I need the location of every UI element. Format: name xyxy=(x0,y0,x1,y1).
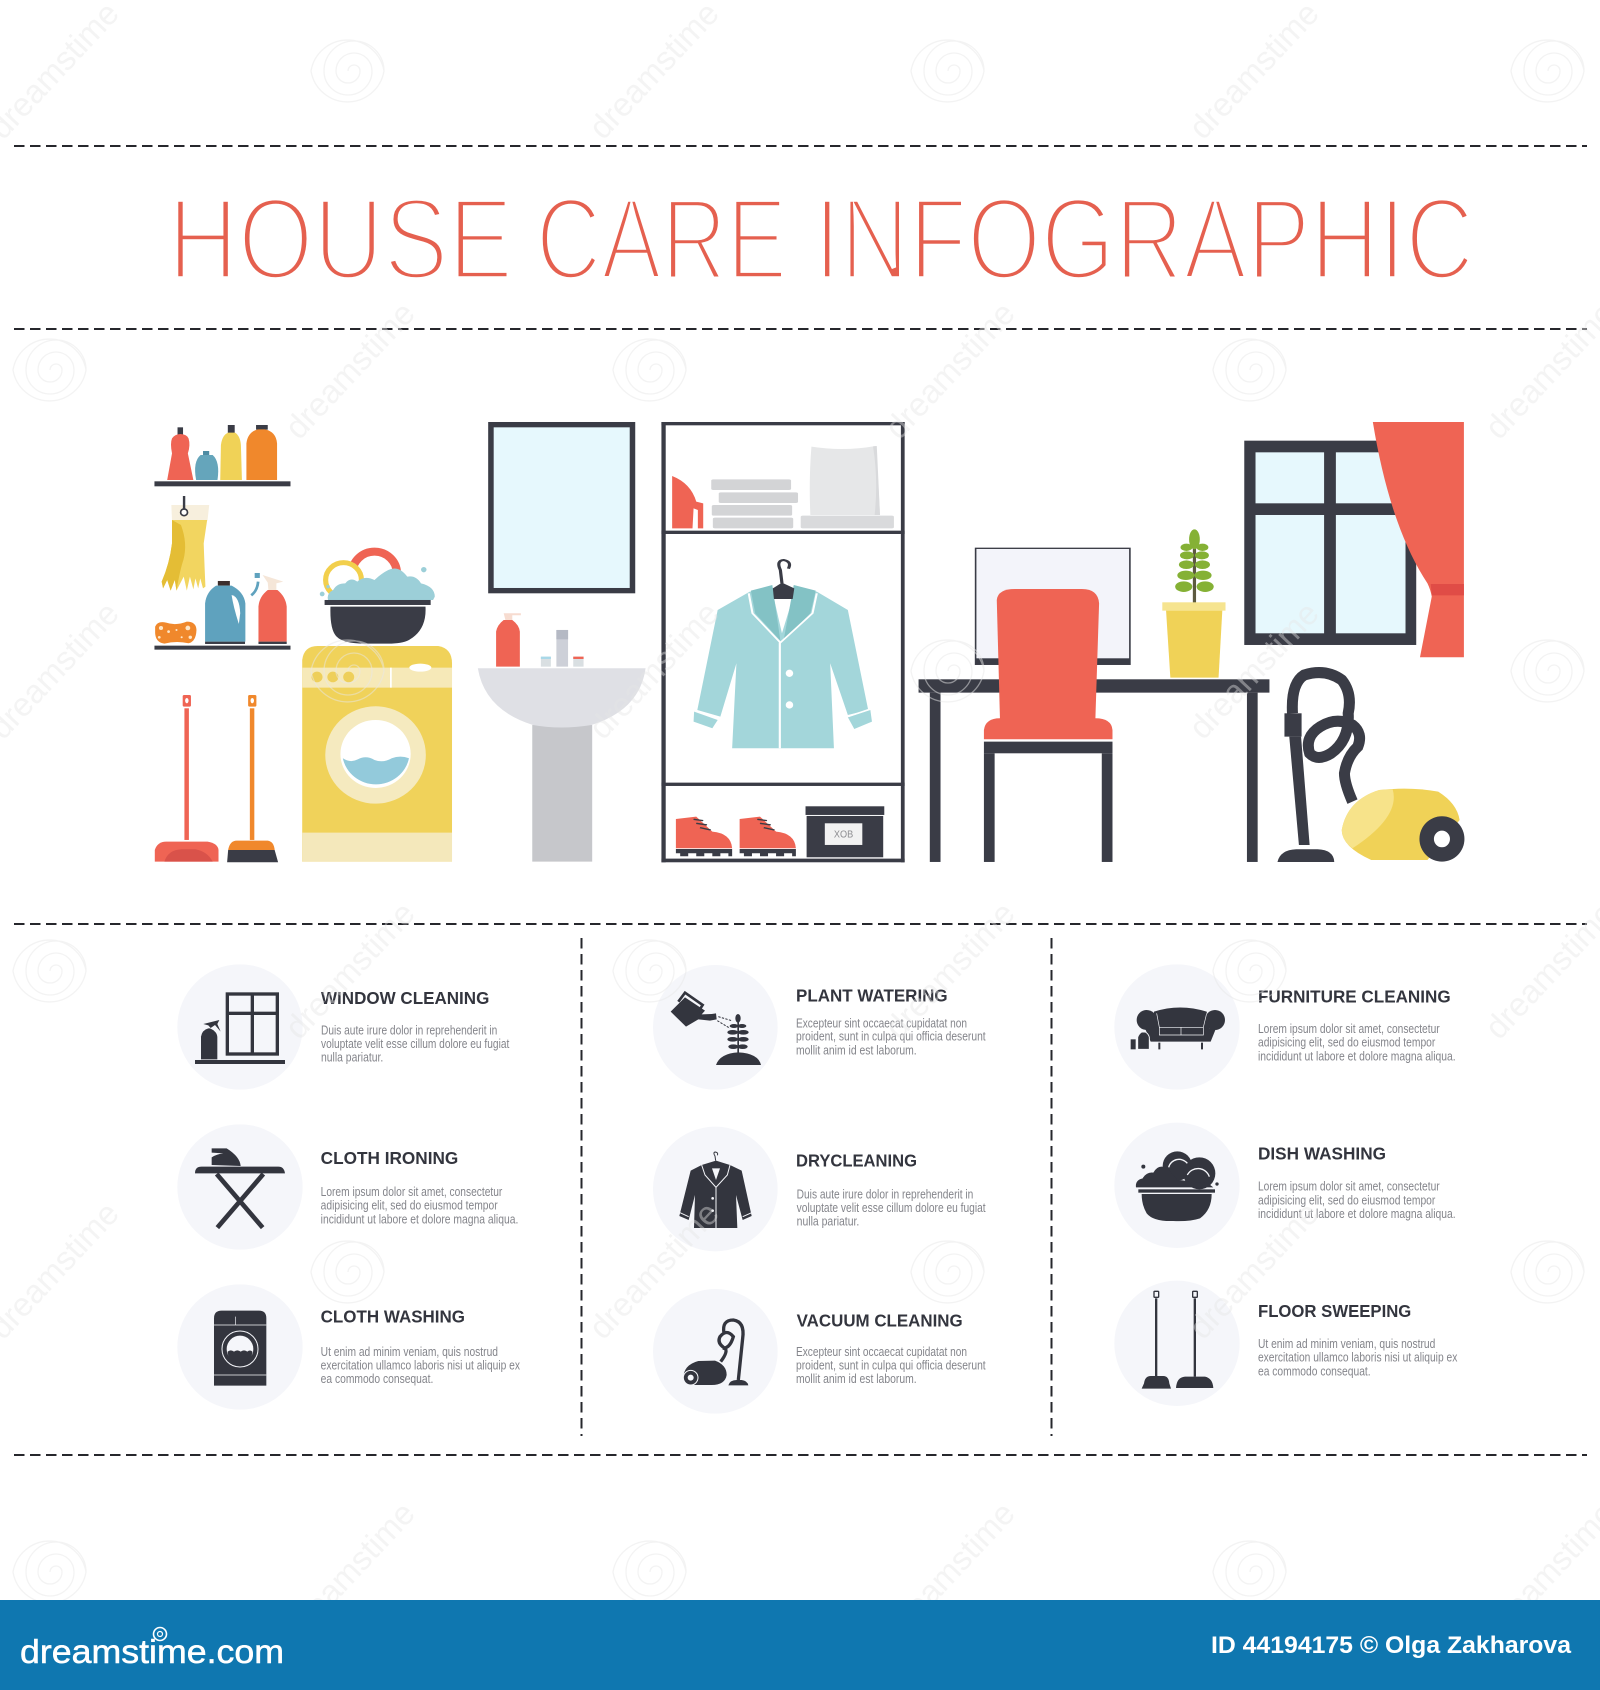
icon: watering can and plant xyxy=(671,993,761,1065)
item: plant watering: mollit anim id est laborum. xyxy=(796,1043,917,1057)
item: drycleaning: nulla pariatur. xyxy=(797,1215,859,1229)
panel: column 1 services xyxy=(177,964,521,1410)
icon: ironing board xyxy=(195,1148,285,1228)
icon: sofa and bottles xyxy=(1131,1007,1225,1049)
item: cloth ironing: CLOTH IRONING xyxy=(321,1148,458,1168)
item: cloth washing: exercitation ullamco laboris nisi ut aliquip ex xyxy=(321,1358,521,1372)
item: vacuum cleaning: proident, sunt in culpa qui officia deserunt xyxy=(796,1358,986,1372)
icon: basin with foam xyxy=(1136,1151,1219,1221)
image credit: ID 44194175 © Olga Zakharova xyxy=(1211,1632,1572,1659)
watermark overlay: dreamstime xyxy=(877,895,1022,1046)
chair xyxy=(984,589,1112,862)
item: floor sweeping: FLOOR SWEEPING xyxy=(1258,1301,1411,1321)
sink xyxy=(478,613,646,862)
item: drycleaning: DRYCLEANING xyxy=(796,1151,917,1171)
item: dish washing: Lorem ipsum dolor sit amet, consectetur xyxy=(1258,1180,1440,1194)
lower shelf with sponge and cleaners xyxy=(154,573,290,650)
watermark overlay: dreamstime xyxy=(1181,1195,1326,1346)
monitor xyxy=(975,548,1131,665)
item: drycleaning xyxy=(653,1127,986,1251)
item: vacuum cleaning: Excepteur sint occaecat cupidatat non xyxy=(796,1345,967,1359)
boots xyxy=(676,817,796,856)
item: furniture cleaning: incididunt ut labore et dolore magna aliqua. xyxy=(1258,1049,1456,1063)
item: vacuum cleaning: mollit anim id est laborum. xyxy=(796,1372,917,1386)
top shelf with bottles xyxy=(154,425,290,486)
plant pot xyxy=(1162,529,1226,678)
item: plant watering: proident, sunt in culpa qui officia deserunt xyxy=(796,1030,986,1044)
item: cloth ironing xyxy=(177,1124,518,1250)
icon: washing machine xyxy=(214,1311,266,1386)
panel: room scene left (shelves, washer, sink) xyxy=(154,425,646,862)
item: plant watering xyxy=(653,965,986,1090)
title: INFOGRAPHIC xyxy=(814,174,1474,304)
icon: vacuum xyxy=(683,1320,748,1385)
window with curtain xyxy=(1244,422,1464,657)
item: furniture cleaning: FURNITURE CLEANING xyxy=(1258,987,1451,1007)
watermark overlay: dreamstime xyxy=(581,595,726,746)
item: dish washing: adipisicing elit, sed do eiusmod tempor xyxy=(1258,1193,1435,1207)
vacuum cleaner xyxy=(1277,673,1464,862)
watermark overlay: dreamstime xyxy=(277,1495,422,1646)
mirror xyxy=(491,425,632,591)
item: vacuum cleaning xyxy=(653,1289,986,1414)
item: window cleaning: WINDOW CLEANING xyxy=(321,988,489,1008)
item: cloth washing xyxy=(177,1284,521,1410)
item: window cleaning: nulla pariatur. xyxy=(321,1051,383,1065)
item: window cleaning xyxy=(177,964,510,1090)
desk xyxy=(919,679,1269,862)
storage box xyxy=(806,806,884,857)
item: dish washing xyxy=(1114,1123,1456,1248)
iron xyxy=(672,476,703,528)
folded towels and pillow xyxy=(711,446,894,528)
washing machine xyxy=(302,646,452,862)
watermark overlay: dreamstime xyxy=(1181,595,1326,746)
rubber glove on hook xyxy=(162,496,209,591)
storage box: XOB xyxy=(834,828,853,840)
watermark overlay: dreamstime xyxy=(277,295,422,446)
item: drycleaning: Duis aute irure dolor in reprehenderit in xyxy=(797,1188,973,1202)
title xyxy=(168,174,1474,304)
item: cloth washing: Ut enim ad minim veniam, quis nostrud xyxy=(321,1345,498,1359)
item: vacuum cleaning: VACUUM CLEANING xyxy=(797,1311,963,1331)
footer bar xyxy=(0,1600,1600,1690)
panel: column 2 services xyxy=(653,965,986,1414)
item: cloth ironing: Lorem ipsum dolor sit amet, consectetur xyxy=(321,1185,502,1199)
broom xyxy=(227,695,278,862)
title: HOUSE xyxy=(168,174,513,304)
watermark overlay: dreamstime xyxy=(277,895,422,1046)
footer logo: dreamstime.com xyxy=(20,1633,284,1670)
panel: column 3 services xyxy=(1114,964,1458,1406)
item: floor sweeping xyxy=(1114,1281,1458,1406)
item: cloth ironing: adipisicing elit, sed do eiusmod tempor xyxy=(321,1199,498,1213)
watermark overlay: dreamstime xyxy=(581,1195,726,1346)
item: plant watering: Excepteur sint occaecat cupidatat non xyxy=(796,1016,967,1030)
coat on hanger xyxy=(694,560,872,748)
item: dish washing: incididunt ut labore et dolore magna aliqua. xyxy=(1258,1207,1456,1221)
item: window cleaning: Duis aute irure dolor in reprehenderit in xyxy=(321,1024,497,1038)
wardrobe frame xyxy=(661,422,905,862)
item: cloth washing: CLOTH WASHING xyxy=(321,1307,465,1327)
dish basin with foam xyxy=(320,552,435,644)
icon: broom and dustpan xyxy=(1142,1291,1213,1389)
title: CARE xyxy=(536,174,787,304)
panel: room scene right (wardrobe, desk, window, vacuum) xyxy=(661,422,1464,862)
item: dish washing: DISH WASHING xyxy=(1258,1144,1386,1164)
icon: window and spray xyxy=(195,994,285,1064)
item: floor sweeping: ea commodo consequat. xyxy=(1258,1364,1371,1378)
watermark overlay: dreamstime xyxy=(877,295,1022,446)
item: plant watering: PLANT WATERING xyxy=(796,986,948,1006)
item: floor sweeping: Ut enim ad minim veniam, quis nostrud xyxy=(1258,1337,1435,1351)
icon: jacket on hanger xyxy=(679,1152,752,1228)
item: cloth washing: ea commodo consequat. xyxy=(321,1372,433,1386)
item: window cleaning: voluptate velit esse cillum dolore eu fugiat xyxy=(321,1037,510,1051)
item: drycleaning: voluptate velit esse cillum dolore eu fugiat xyxy=(797,1201,986,1215)
item: furniture cleaning xyxy=(1114,964,1456,1090)
item: furniture cleaning: adipisicing elit, sed do eiusmod tempor xyxy=(1258,1036,1435,1050)
item: furniture cleaning: Lorem ipsum dolor sit amet, consectetur xyxy=(1258,1022,1440,1036)
item: cloth ironing: incididunt ut labore et dolore magna aliqua. xyxy=(321,1212,518,1226)
item: floor sweeping: exercitation ullamco laboris nisi ut aliquip ex xyxy=(1258,1351,1458,1365)
watermark overlay: dreamstime xyxy=(877,1495,1022,1646)
dustpan xyxy=(155,695,219,862)
